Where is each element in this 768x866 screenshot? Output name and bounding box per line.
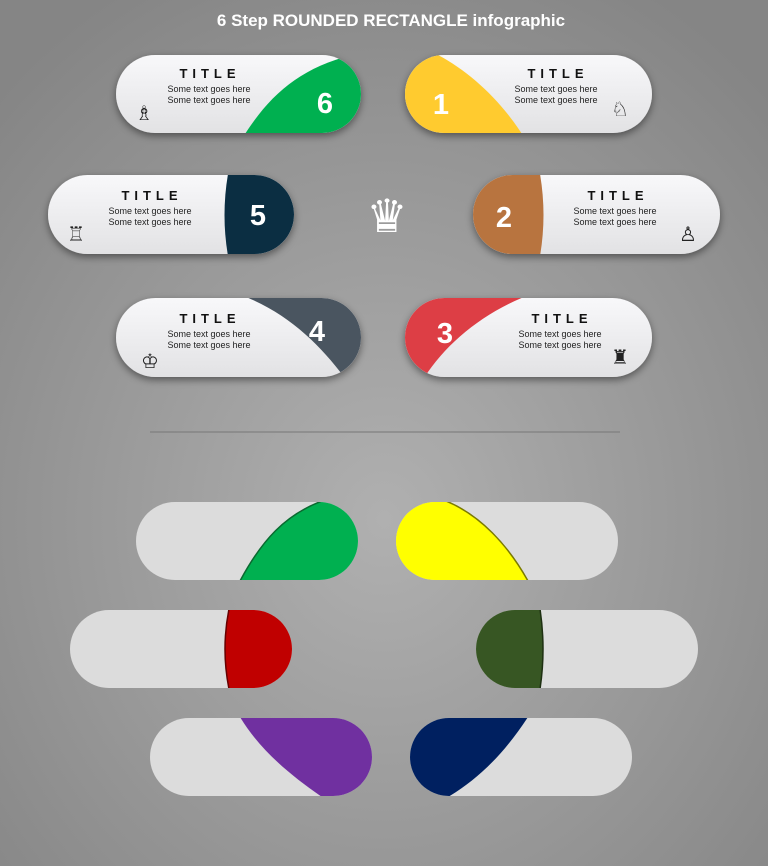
blank pill dark green (470, 609, 698, 689)
step 1 card: 1 (433, 89, 449, 121)
icon: bishop: ♗ (135, 101, 153, 125)
step 4 card: Some text goes here (167, 340, 251, 350)
step 6 card: TITLE (179, 66, 241, 81)
step 2 card: 2 (496, 202, 512, 234)
step 4 card: Some text goes here (167, 329, 251, 339)
step 6 card: 6 (317, 88, 333, 120)
step 5 card: 5 (250, 200, 266, 232)
step 6 card: Some text goes here (167, 95, 251, 105)
step 5 card: Some text goes here (108, 217, 192, 227)
blank pill navy (400, 717, 632, 797)
title: 6 Step ROUNDED RECTANGLE infographic (217, 11, 565, 30)
step 4 card (116, 297, 370, 378)
step 3 card: 3 (437, 318, 453, 350)
blank pill purple (150, 717, 380, 797)
blank pill red (70, 609, 300, 689)
step 3 card (400, 297, 652, 378)
icon: king: ♔ (141, 349, 159, 373)
step 2 card: Some text goes here (573, 217, 657, 227)
step 2 card: TITLE (587, 188, 649, 203)
step 1 card (400, 55, 652, 134)
icon: rook: ♜ (611, 345, 629, 369)
step 4 card: 4 (309, 316, 325, 348)
step 2 card (470, 174, 720, 256)
step 5 card: Some text goes here (108, 206, 192, 216)
step 6 card (116, 55, 370, 134)
step 1 card: TITLE (527, 66, 589, 81)
step 3 card: Some text goes here (518, 340, 602, 350)
icon: crown: ♛ (366, 189, 408, 243)
step 1 card: Some text goes here (514, 95, 598, 105)
blank pill yellow (390, 501, 618, 581)
blank pill green (136, 501, 370, 581)
icon: pawn: ♙ (679, 222, 697, 246)
step 5 card (48, 174, 300, 256)
step 3 card: Some text goes here (518, 329, 602, 339)
step 6 card: Some text goes here (167, 84, 251, 94)
step 5 card: TITLE (121, 188, 183, 203)
step 1 card: Some text goes here (514, 84, 598, 94)
icon: rook: ♖ (67, 222, 85, 246)
step 2 card: Some text goes here (573, 206, 657, 216)
step 4 card: TITLE (179, 311, 241, 326)
step 3 card: TITLE (531, 311, 593, 326)
icon: knight: ♘ (611, 97, 629, 121)
